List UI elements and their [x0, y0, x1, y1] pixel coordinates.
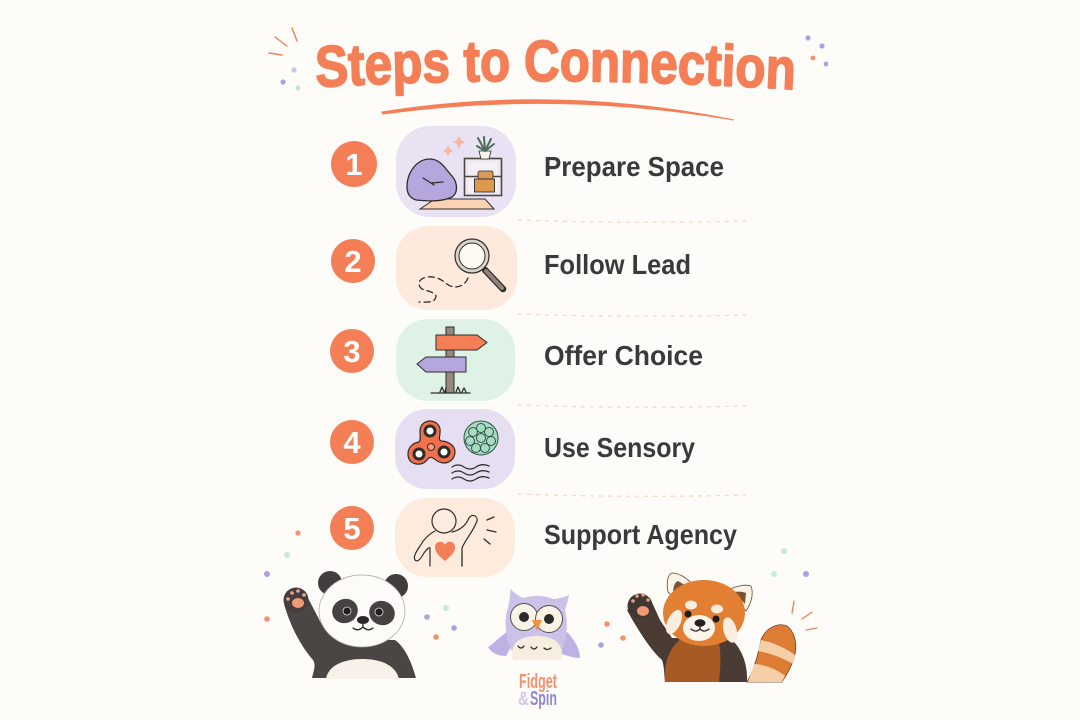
title underline: [382, 100, 734, 120]
step 2: follow lead: [331, 226, 691, 310]
dashed dividers: [518, 220, 746, 496]
number badge 2: [331, 239, 375, 283]
label: offer choice: Offer Choice: [544, 340, 703, 371]
title sparkle left: [269, 28, 301, 91]
panel: follow lead icon: [396, 226, 517, 310]
step 4: use sensory: [330, 409, 695, 489]
step 1: prepare space: [331, 126, 724, 217]
panel: support agency icon: [395, 498, 515, 577]
logo: Fidget & Spin: Fidget: [519, 671, 557, 693]
number badge 3: 3: [343, 334, 361, 369]
red panda waving: [627, 573, 796, 682]
logo: Fidget & Spin: [518, 671, 557, 710]
step 5: support agency: [330, 498, 737, 577]
step 3: offer choice: [330, 319, 703, 401]
number badge 1: 1: [345, 147, 363, 182]
panel: use sensory icon: [395, 409, 515, 489]
number badge 5: [330, 506, 374, 550]
title: Steps to Connection: [316, 40, 794, 96]
icon: waves: [452, 465, 489, 481]
logo: Fidget & Spin: Spin: [530, 688, 557, 710]
number badge 3: [330, 329, 374, 373]
icon: fidget spinner: [408, 421, 455, 464]
panda waving: [284, 571, 416, 679]
number badge 4: [330, 420, 374, 464]
number badge 5: 5: [343, 511, 361, 546]
icon: sensory ball: [464, 421, 498, 455]
panel: prepare space icon: [396, 126, 516, 217]
tail: [747, 625, 796, 682]
panel: offer choice icon: [396, 319, 515, 401]
owl: [488, 589, 580, 660]
number badge 1: [331, 141, 377, 187]
label: use sensory: Use Sensory: [544, 432, 695, 463]
label: follow lead: Follow Lead: [544, 249, 691, 280]
number badge 2: 2: [344, 244, 362, 279]
title sparkle right: [805, 35, 828, 66]
confetti dots: [264, 530, 817, 648]
logo: Fidget & Spin: &: [518, 689, 529, 710]
label: support agency: Support Agency: [544, 519, 737, 550]
label: prepare space: Prepare Space: [544, 151, 724, 182]
number badge 4: 4: [343, 425, 361, 460]
